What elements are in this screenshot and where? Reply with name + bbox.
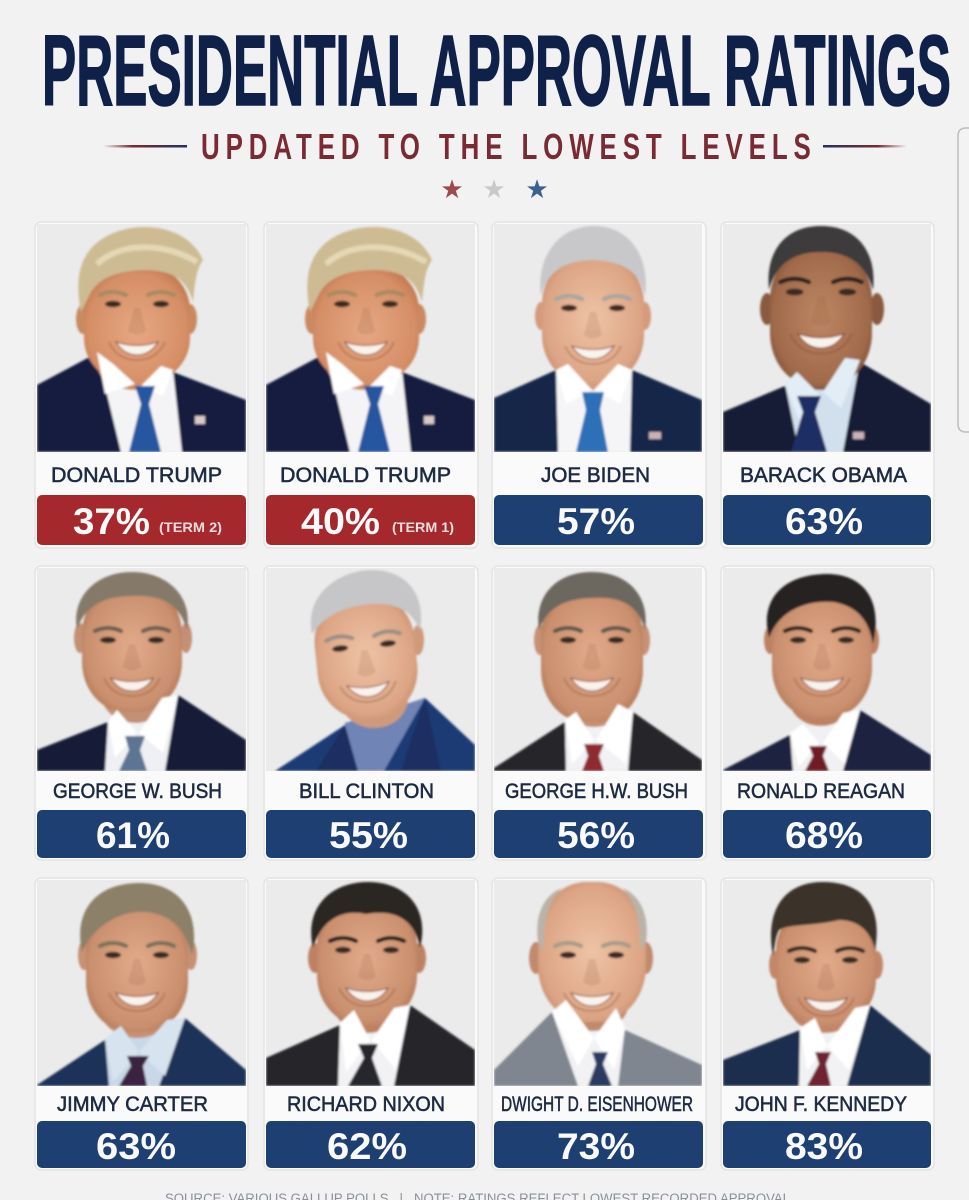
card: Bill Clinton: [264, 566, 478, 860]
card: Donald Trump term 2: [35, 222, 248, 548]
card: John F. Kennedy: [721, 878, 934, 1170]
card: George W. Bush: [35, 566, 248, 860]
card: Richard Nixon: [264, 878, 478, 1170]
subtitle with rules: UPDATED TO THE LOWEST LEVELS: [201, 127, 811, 167]
rating bar: [723, 495, 931, 545]
name: JOE BIDEN: [541, 464, 650, 487]
rating bar: [723, 1121, 931, 1168]
rating bar: 61%: [96, 815, 170, 856]
rating bar: [494, 495, 703, 545]
portrait: Donald Trump: [266, 224, 475, 452]
portrait: Bill Clinton: [266, 568, 475, 771]
rating bar: [266, 810, 475, 858]
stars: ★: [525, 174, 549, 204]
rating bar: 40%: [301, 501, 380, 542]
rating bar: [37, 495, 246, 545]
rating bar: 62%: [327, 1126, 407, 1167]
name: RICHARD NIXON: [287, 1093, 445, 1116]
name: JOHN F. KENNEDY: [735, 1093, 907, 1116]
rating bar: (TERM 2): [159, 519, 222, 535]
card: Joe Biden: [492, 222, 706, 548]
rating bar: [494, 810, 703, 858]
rating bar: [494, 1121, 703, 1168]
portrait: Barack Obama: [723, 224, 931, 452]
stars: [440, 174, 549, 204]
rating bar: 55%: [329, 815, 408, 856]
card: Ronald Reagan: [721, 566, 934, 860]
rating bar: 83%: [785, 1126, 863, 1167]
portrait: Donald Trump: [37, 224, 246, 452]
name: JIMMY CARTER: [57, 1093, 208, 1116]
card: George H.W. Bush: [492, 566, 706, 860]
side tab outline: [958, 128, 969, 432]
card: Dwight D. Eisenhower: [492, 878, 706, 1170]
name: GEORGE H.W. BUSH: [505, 780, 688, 803]
rating bar: 57%: [557, 501, 635, 542]
name: DONALD TRUMP: [51, 464, 222, 487]
rating bar: [37, 1121, 246, 1168]
card: Donald Trump term 1: [264, 222, 478, 548]
rating bar: [266, 1121, 475, 1168]
portrait: Dwight D. Eisenhower: [494, 880, 702, 1086]
name: DWIGHT D. EISENHOWER: [501, 1093, 693, 1116]
rating bar: (TERM 1): [392, 519, 454, 535]
stars: ★: [440, 174, 464, 204]
portrait: Jimmy Carter: [37, 880, 246, 1086]
rating bar: 73%: [557, 1126, 635, 1167]
portrait: George H.W. Bush: [494, 568, 702, 771]
rating bar: 37%: [73, 501, 150, 542]
name: BARACK OBAMA: [740, 464, 907, 487]
name: GEORGE W. BUSH: [53, 780, 222, 803]
rating bar: [266, 495, 475, 545]
portrait: John F. Kennedy: [723, 880, 931, 1086]
rating bar: 68%: [785, 815, 863, 856]
portrait: Richard Nixon: [266, 880, 475, 1086]
rating bar: [37, 810, 246, 858]
rating bar: 63%: [785, 501, 863, 542]
name: BILL CLINTON: [299, 780, 434, 803]
name: DONALD TRUMP: [280, 464, 451, 487]
rating bar: 56%: [557, 815, 635, 856]
rating bar: [723, 810, 931, 858]
portrait: Joe Biden: [494, 224, 702, 452]
card: Jimmy Carter: [35, 878, 248, 1170]
stars: ★: [482, 174, 506, 204]
name: RONALD REAGAN: [737, 780, 905, 803]
card: Barack Obama: [721, 222, 934, 548]
rating bar: 63%: [96, 1126, 176, 1167]
portrait: Ronald Reagan: [723, 568, 931, 771]
portrait: George W. Bush: [37, 568, 246, 771]
